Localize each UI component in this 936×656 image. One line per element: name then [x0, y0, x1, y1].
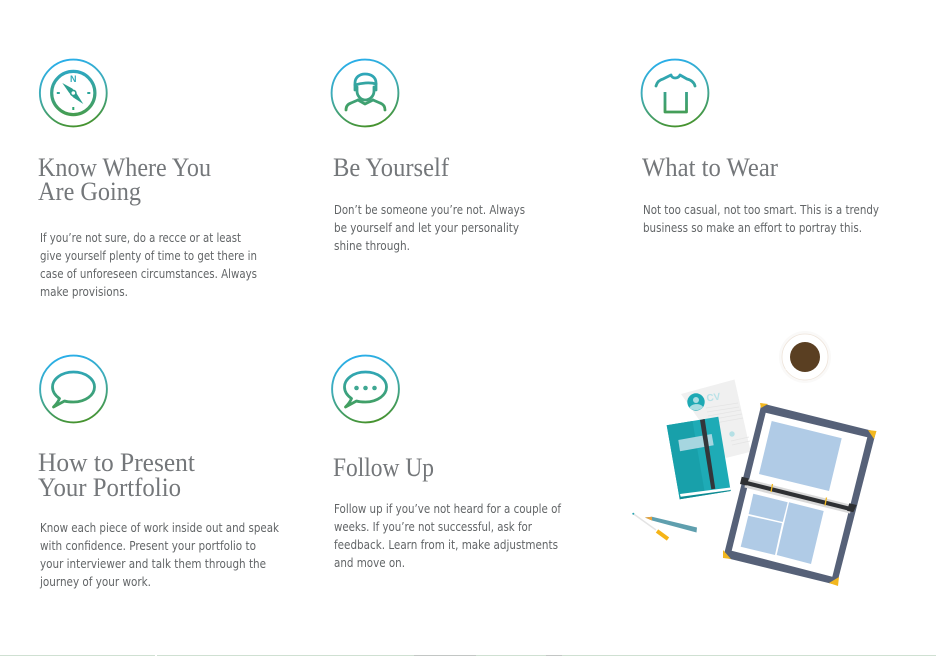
icon: coffee cup [779, 331, 831, 383]
icon: CV sheet [681, 380, 751, 458]
panel: what to wear [642, 60, 879, 235]
text block: Know each piece of work inside out and speak [40, 520, 280, 535]
text block: and move on. [334, 555, 405, 570]
icon: CV sheet: CV [706, 392, 722, 404]
illustration: desk with portfolio [632, 331, 876, 586]
text block [334, 501, 562, 570]
heading [38, 448, 196, 502]
text block [334, 202, 525, 253]
icon: compass: N [70, 74, 77, 84]
icon: compass [40, 60, 107, 126]
text block: journey of your work. [39, 574, 151, 589]
icon: pen [632, 513, 668, 539]
text block: feedback. Learn from it, make adjustments [334, 537, 558, 552]
text block: Don’t be someone you’re not. Always [334, 202, 525, 217]
icon: person [332, 60, 398, 126]
text block: weeks. If you’re not successful, ask for [334, 519, 533, 534]
text block: Not too casual, not too smart. This is a trendy [643, 202, 879, 217]
icon: pencil [645, 517, 697, 532]
heading: How to Present [38, 448, 196, 477]
text block: your interviewer and talk them through the [40, 556, 266, 571]
heading: Are Going [38, 177, 141, 206]
panel: how to present your portfolio [38, 356, 280, 589]
text block: case of unforeseen circumstances. Always [40, 266, 257, 281]
icon: speech bubble [40, 356, 107, 422]
text block: Follow up if you’ve not heard for a couple of [334, 501, 562, 516]
bottom edge line [0, 655, 936, 656]
text block [40, 230, 257, 299]
heading: Be Yourself [333, 153, 449, 182]
text block [643, 202, 879, 235]
text block: make provisions. [40, 284, 128, 299]
icon: speech bubble with dots [332, 356, 399, 422]
panel: know where you are going [38, 60, 257, 299]
icon: open portfolio [723, 403, 876, 586]
heading: Your Portfolio [38, 473, 181, 502]
icon: shirt [642, 60, 708, 126]
text block: business so make an effort to portray this. [643, 220, 862, 235]
panel: be yourself [332, 60, 525, 253]
text block: be yourself and let your personality [334, 220, 519, 235]
text block: If you’re not sure, do a recce or at least [40, 230, 241, 245]
text block: with confidence. Present your portfolio to [40, 538, 256, 553]
text block: shine through. [334, 238, 410, 253]
heading: Know Where You [38, 153, 211, 182]
heading: What to Wear [642, 153, 778, 182]
text block: give yourself plenty of time to get there in [40, 248, 257, 263]
panel: follow up [332, 356, 562, 570]
text block [39, 520, 280, 589]
icon: notebook [667, 417, 731, 499]
heading [38, 153, 211, 206]
heading: Follow Up [333, 453, 434, 482]
